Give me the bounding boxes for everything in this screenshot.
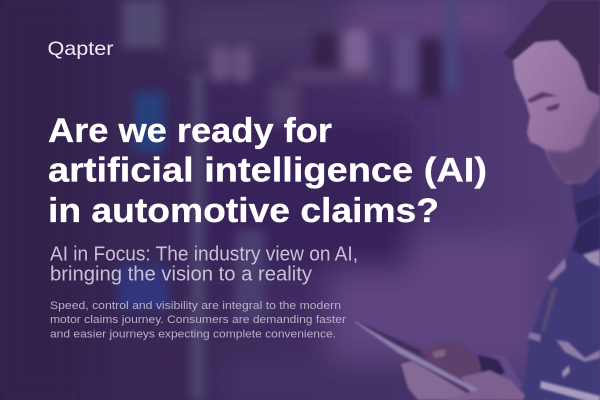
jacket collar and pocket details (528, 192, 600, 400)
jacket (522, 195, 600, 400)
body text: Speed, control and visibility are integral to the modern (50, 300, 341, 312)
neck (560, 130, 600, 203)
title (48, 112, 487, 230)
sleeve (490, 354, 522, 395)
tablet top edge (353, 321, 432, 358)
beard (545, 108, 600, 184)
tablet edge (353, 321, 478, 392)
eyebrow and eye (527, 92, 560, 111)
logo: Qapter: Qapter (48, 38, 114, 60)
subtitle: bringing the vision to a reality (50, 264, 312, 286)
hands (401, 361, 470, 400)
title: in automotive claims? (48, 192, 439, 230)
title: artificial intelligence (AI) (48, 152, 487, 190)
body text (50, 300, 346, 340)
body text: motor claims journey. Consumers are demanding faster (50, 314, 346, 326)
body text: and easier journeys expecting complete convenience. (50, 328, 336, 340)
title: Are we ready for (48, 112, 332, 150)
subtitle: AI in Focus: The industry view on AI, (50, 244, 358, 266)
face (513, 38, 600, 184)
subtitle (50, 244, 358, 286)
photo: mechanic with tablet (353, 0, 600, 400)
hair (503, 0, 600, 96)
